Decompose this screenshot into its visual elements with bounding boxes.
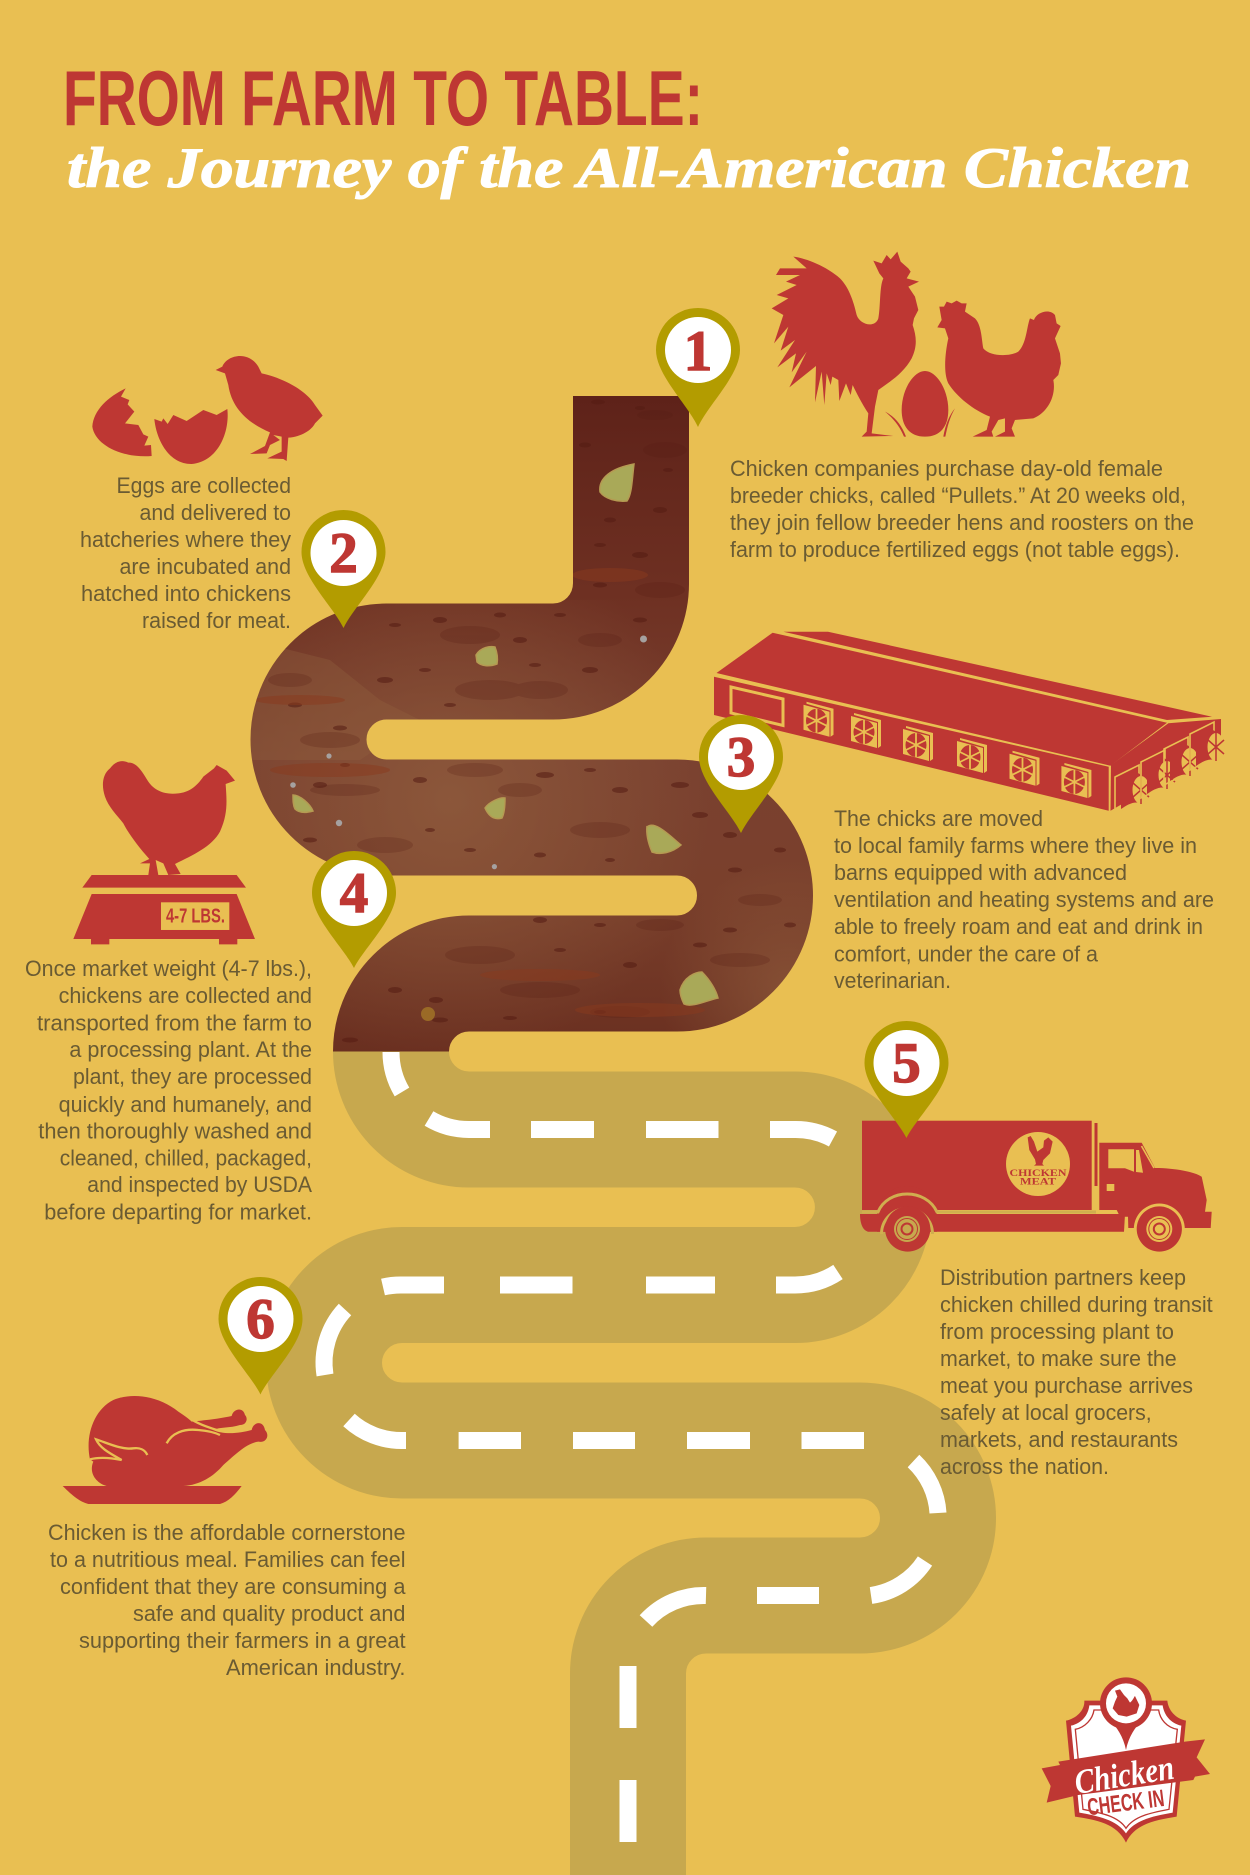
text: step 4 [25,956,312,1224]
text: step 4: then thoroughly washed and [38,1118,312,1144]
text: step 5: across the nation. [940,1454,1109,1479]
icon: roast chicken on platter [63,1396,267,1504]
text: step 5: markets, and restaurants [940,1427,1178,1452]
pin 3: 3 [727,726,755,789]
text: step 4: cleaned, chilled, packaged, [60,1146,312,1170]
text: step 6 [48,1520,406,1680]
text: step 4: a processing plant. At the [69,1037,312,1062]
icon: delivery truck: CHICKEN [1010,1168,1067,1178]
pin 6 [218,1277,302,1394]
text: step 5 [940,1265,1213,1479]
text: step 4: chickens are collected and [59,983,312,1008]
text: step 2: are incubated and [120,554,291,579]
text: step 2: Eggs are collected [116,473,291,498]
icon: delivery truck: MEAT [1020,1176,1056,1186]
pin 5 [864,1021,948,1138]
text: step 3 [834,806,1214,993]
text: step 5: meat you purchase arrives [940,1373,1193,1398]
pin 2: 2 [329,522,358,585]
pin 6: 6 [246,1288,275,1351]
pin 5: 5 [892,1032,921,1095]
text: step 1: breeder chicks, called “Pullets.” At 20 weeks old, [730,483,1186,508]
text: step 2: hatched into chickens [81,581,291,606]
text: step 6: American industry. [226,1655,406,1680]
logo: Chicken Check In badge: CHECK IN [1086,1785,1166,1821]
subtitle: the Journey of the All-American Chicken [67,137,1191,200]
text: step 6: safe and quality product and [133,1601,406,1626]
title: FROM FARM TO TABLE: [63,54,703,142]
text: step 4: plant, they are processed [73,1064,312,1089]
text: step 5: market, to make sure the [940,1346,1177,1371]
text: step 5: chicken chilled during transit [940,1292,1213,1317]
text: step 4: before departing for market. [44,1200,312,1224]
text: step 6: to a nutritious meal. Families can feel [50,1547,406,1572]
text: step 3: barns equipped with advanced [834,860,1127,885]
road: paved section with lane dashes [324,1051,938,1875]
text: step 6: confident that they are consuming a [60,1574,406,1599]
text: step 4: and inspected by USDA [87,1172,312,1197]
text: step 3: to local family farms where they live in [834,833,1197,858]
text: step 3: comfort, under the care of a [834,942,1098,966]
pin 1: 1 [684,320,712,383]
text: step 4: transported from the farm to [37,1010,312,1036]
icon: delivery truck [860,1121,1212,1254]
pin 4 [312,851,396,968]
text: step 1: farm to produce fertilized eggs (not table eggs). [730,537,1180,562]
text: step 3: The chicks are moved [834,806,1043,831]
icon: chicken barn [714,632,1224,813]
text: step 5: safely at local grocers, [940,1400,1152,1425]
text: step 1 [730,456,1194,562]
text: step 2: raised for meat. [142,608,291,633]
text: step 2: hatcheries where they [80,527,292,552]
pin 2 [302,510,386,628]
pin 4: 4 [340,862,368,925]
text: step 6: supporting their farmers in a great [79,1628,406,1653]
text: step 1: they join fellow breeder hens and roosters on the [730,510,1194,535]
leaves and pebbles on the dirt road [290,464,718,1021]
text: step 2: and delivered to [140,500,291,525]
icon: hen on scale with weight label [73,761,255,944]
text: step 5: Distribution partners keep [940,1265,1186,1290]
text: step 3: able to freely roam and eat and drink in [834,914,1203,939]
pin 3 [699,715,783,833]
icon: hatching egg shells and chick [92,356,323,464]
logo: Chicken Check In badge: Chicken [1072,1749,1177,1802]
text: step 4: quickly and humanely, and [59,1092,312,1117]
text: step 4: Once market weight (4-7 lbs.), [25,956,312,981]
text: step 3: veterinarian. [834,968,951,993]
icon: rooster, egg and hen [772,252,1061,437]
text: step 3: ventilation and heating systems and are [834,887,1214,912]
dirt road section [250,396,813,1052]
icon: hen on scale with weight label: 4-7 LBS. [166,906,225,928]
text: step 5: from processing plant to [940,1319,1174,1344]
text: step 6: Chicken is the affordable cornerstone [48,1520,406,1545]
logo: Chicken Check In badge [1042,1677,1210,1843]
pin 1 [656,308,740,427]
text: step 1: Chicken companies purchase day-old female [730,456,1163,481]
text: step 2 [80,473,292,633]
